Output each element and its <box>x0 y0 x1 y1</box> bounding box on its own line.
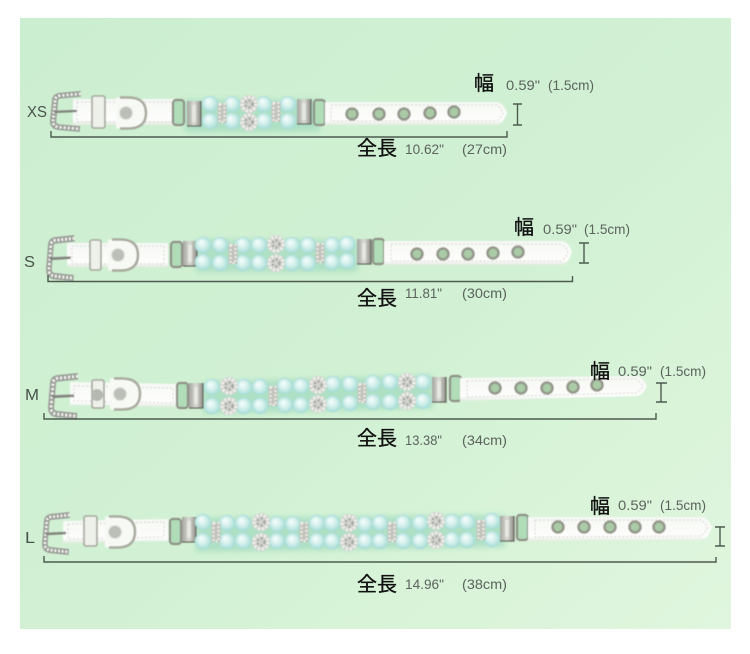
S width label <box>514 216 630 239</box>
XS width label: (1.5cm) <box>548 77 594 93</box>
M size row <box>25 360 706 450</box>
L length label <box>357 573 507 596</box>
M length label: 13.38" <box>405 432 442 448</box>
S size row <box>24 216 630 310</box>
L length label: (38cm) <box>462 576 507 592</box>
XS width label: 幅 <box>474 72 494 95</box>
XS length label <box>357 137 507 160</box>
L width label: (1.5cm) <box>660 497 706 513</box>
S collar <box>49 235 572 278</box>
XS width marker <box>513 104 522 125</box>
S length label: 11.81" <box>405 285 442 301</box>
M width label: (1.5cm) <box>660 363 706 379</box>
XS length label: (27cm) <box>462 141 507 157</box>
S width marker <box>579 243 589 263</box>
XS collar <box>53 94 507 132</box>
L size label: L <box>25 530 35 547</box>
XS size row <box>27 72 594 160</box>
XS length label: 10.62" <box>405 141 444 157</box>
L length label: 全長 <box>357 573 397 596</box>
XS length label: 全長 <box>357 137 397 160</box>
M width label: 幅 <box>590 360 610 383</box>
XS size label: XS <box>27 104 47 121</box>
M width label: 0.59" <box>618 363 652 379</box>
L width marker <box>715 527 725 546</box>
M size label: M <box>25 387 39 404</box>
S length label: 全長 <box>357 287 397 310</box>
M collar <box>51 373 647 416</box>
M length label: (34cm) <box>462 432 507 448</box>
XS length bracket <box>51 131 507 137</box>
M width marker <box>656 383 667 402</box>
M width label <box>590 360 706 383</box>
L size row <box>25 495 725 596</box>
S length label: (30cm) <box>462 285 507 301</box>
L length label: 14.96" <box>405 576 444 592</box>
L width label <box>590 495 706 518</box>
S width label: (1.5cm) <box>584 221 630 237</box>
M length label: 全長 <box>357 427 397 450</box>
L collar <box>45 512 712 552</box>
S length label <box>357 285 507 310</box>
XS width label <box>474 72 594 95</box>
L length bracket <box>44 556 716 562</box>
L width label: 幅 <box>590 495 610 518</box>
S width label: 0.59" <box>543 221 577 237</box>
S width label: 幅 <box>514 216 534 239</box>
M length label <box>357 427 507 450</box>
XS width label: 0.59" <box>506 77 540 93</box>
S length bracket <box>48 275 572 282</box>
L width label: 0.59" <box>618 497 652 513</box>
S size label: S <box>24 254 35 271</box>
M length bracket <box>44 413 656 419</box>
